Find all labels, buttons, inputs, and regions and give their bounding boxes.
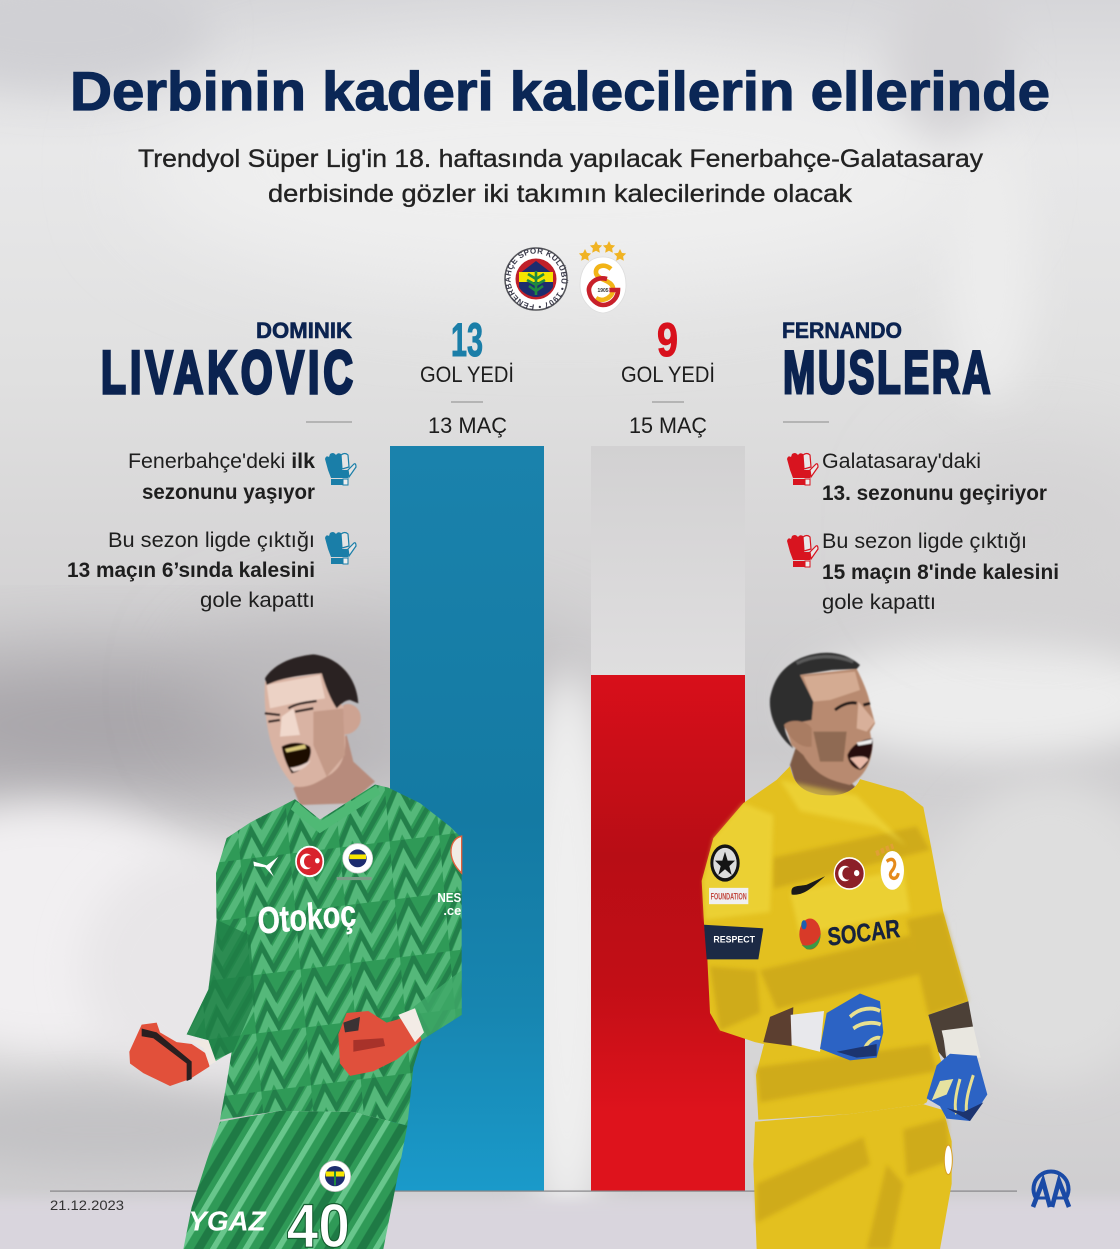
shorts crest [944,1145,952,1175]
stat: goals conceded Muslera: 15 MAÇ [629,413,707,438]
right player name: MUSLERA [783,339,993,406]
left cuff [791,1011,824,1052]
left notes text: Fenerbahçe'deki ilk [128,450,315,473]
subtitle: derbisinde gözler iki takımın kalecilerinde olacak [268,180,853,208]
left player name: LIVAKOVIC [101,339,357,406]
right forearm [928,1001,973,1062]
left glove [820,994,883,1060]
stat: goals conceded Livakovic: GOL YEDİ [420,362,514,387]
icon: AA logo [1033,1171,1069,1207]
left sleeve shading [187,920,255,1060]
sleeve patch [451,836,462,873]
jersey [187,785,462,1126]
jersey shading [710,826,968,1102]
sleeve sponsor [437,893,462,918]
shorts crest [319,1161,351,1192]
foundation patch [709,888,748,904]
subtitle [138,145,984,208]
stat: goals conceded Livakovic: 13 [451,313,483,366]
club crest [337,844,373,880]
right notes text: Galatasaray'daki [822,450,981,473]
right player name [782,318,993,422]
left player name: DOMINIK [256,318,352,343]
swoosh [791,876,825,895]
jersey [702,766,968,1120]
sponsor: Otokoç: Otokoç [256,894,357,942]
stat: goals conceded Livakovic [420,313,514,438]
stat: goals conceded Livakovic: 13 MAÇ [428,413,507,438]
right notes text [822,450,1059,614]
icon: blue glove 2 [325,532,356,564]
sleeve sponsor: .ce [443,905,462,918]
head [265,654,375,805]
stat: goals conceded Muslera: GOL YEDİ [621,362,715,387]
shorts sponsor: YGAZ [188,1205,267,1237]
puma logo [253,857,278,877]
foundation patch: FOUNDATION [711,891,747,902]
Champions League badge [710,844,740,882]
left notes text: 13 maçın 6’sında kalesini [67,559,315,582]
logo: Fenerbahçe crest: FENERBAHÇE SPOR KULÜBÜ • 1907 • [505,248,568,310]
shorts shading [757,1118,950,1249]
head [770,653,875,800]
icon: blue glove 1 [325,453,356,485]
right cuff sleeve band [413,970,462,1040]
socar logo [799,919,821,950]
subtitle: Trendyol Süper Lig'in 18. haftasında yapılacak Fenerbahçe-Galatasaray [138,145,984,173]
right glove [338,1008,424,1076]
left notes text: Bu sezon ligde çıktığı [108,529,315,552]
right glove [927,1054,987,1121]
right notes text: gole kapattı [822,591,936,614]
sleeve sponsor: NES [437,893,462,905]
Turkish flag badge [834,858,864,889]
body [129,785,462,1249]
logo: Galatasaray crest: 1905 [597,288,609,294]
right cuff [942,1027,981,1059]
stat: goals conceded Muslera [621,313,715,438]
left glove [129,1023,216,1086]
captain band [704,925,763,959]
logo: Galatasaray crest [579,241,626,313]
Turkish flag badge [296,847,323,876]
right player name: FERNANDO [782,318,902,343]
title: Derbinin kaderi kalecilerin ellerinde [70,60,1050,122]
left forearm [763,1007,793,1046]
left notes text: sezonunu yaşıyor [142,481,315,504]
icon: red glove 1 [787,453,818,485]
collar [293,790,378,827]
player: Livakovic [129,654,462,1249]
sponsor: SOCAR: SOCAR [826,914,901,952]
bar chart: matches and goals [390,446,745,1191]
jersey highlights [703,780,910,935]
player: Muslera [702,653,987,1249]
baseline and date: 21.12.2023 [50,1197,124,1213]
right notes text: 15 maçın 8'inde kalesini [822,561,1059,584]
right notes text: 13. sezonunu geçiriyor [822,482,1047,505]
captain band: RESPECT [713,934,756,944]
shorts [183,1111,407,1249]
icon: red glove 2 [787,535,818,567]
left notes text [67,450,315,612]
body [702,766,987,1249]
shorts [753,1104,952,1249]
right notes text: Bu sezon ligde çıktığı [822,530,1027,553]
club crest [876,846,904,890]
stat: goals conceded Muslera: 9 [657,313,678,366]
left notes text: gole kapattı [200,589,315,612]
left player name [101,318,357,422]
